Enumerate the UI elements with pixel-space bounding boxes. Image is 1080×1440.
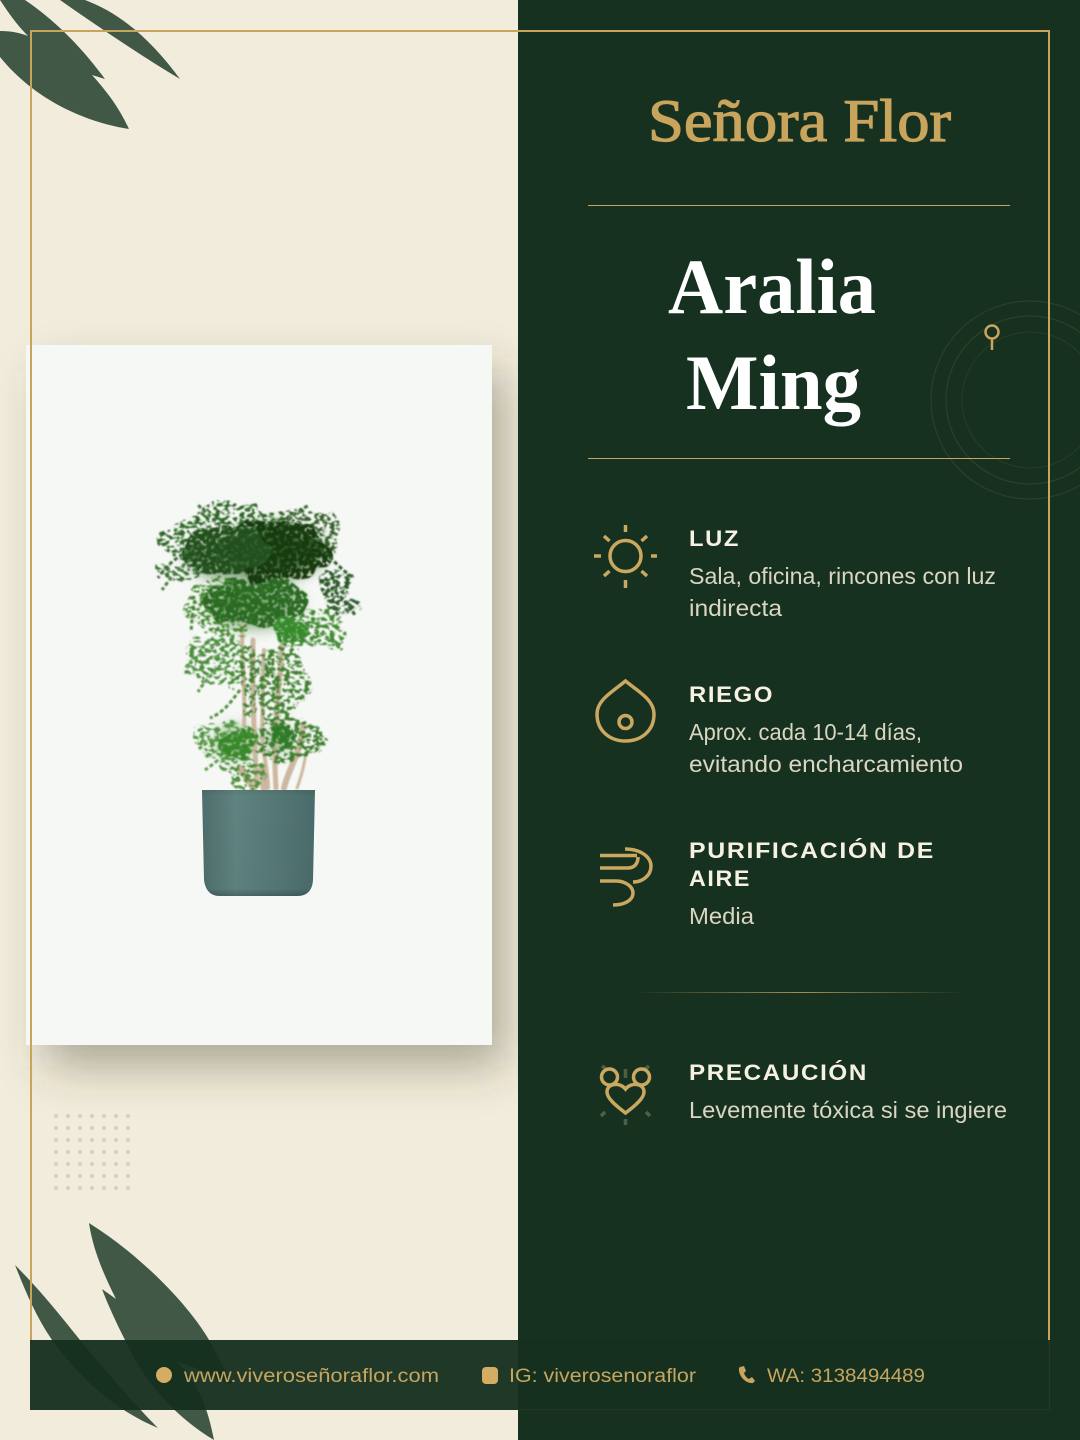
footer bar xyxy=(30,1340,1050,1410)
bottom rule xyxy=(588,458,1010,459)
footer: website: www.viveroseñoraflor.com xyxy=(183,1366,439,1387)
icon: sun xyxy=(594,525,657,588)
text: riego: evitando encharcamiento xyxy=(689,751,963,777)
sparse outer foliage xyxy=(156,505,356,786)
footer: whatsapp: WA: 3138494489 xyxy=(767,1366,925,1387)
care item: riego xyxy=(597,681,963,777)
heading: purificacion xyxy=(689,838,935,891)
plant name xyxy=(668,243,876,426)
left cream background xyxy=(0,0,518,1440)
plant name: Aralia xyxy=(668,243,876,330)
card shadow xyxy=(46,372,504,1066)
heading: precaucion: PRECAUCIÓN xyxy=(689,1060,868,1085)
top rule xyxy=(588,205,1010,206)
text: luz xyxy=(689,563,996,621)
heading: riego: RIEGO xyxy=(689,682,774,707)
pot xyxy=(202,790,315,896)
text: riego xyxy=(689,719,963,777)
decorative rings xyxy=(931,301,1080,499)
heading: purificacion: PURIFICACIÓN DE xyxy=(689,838,935,863)
plant illustration xyxy=(156,505,356,896)
icon: drop xyxy=(597,681,654,741)
dot grid xyxy=(54,1114,130,1190)
top-left leaves xyxy=(0,0,180,129)
care item: precaucion xyxy=(601,1060,1007,1125)
trunks xyxy=(240,625,306,788)
text: riego: Aprox. cada 10-14 días, xyxy=(689,719,922,745)
icon: heart xyxy=(601,1066,650,1125)
icon: wind xyxy=(600,849,651,905)
section divider xyxy=(636,992,966,993)
text: luz: Sala, oficina, rincones con luz xyxy=(689,563,996,589)
heading: luz: LUZ xyxy=(689,526,740,551)
right dark green panel xyxy=(518,0,1080,1440)
bottom-left leaves xyxy=(15,1223,232,1440)
plant name: Ming xyxy=(686,339,861,426)
photo card xyxy=(26,345,492,1045)
twigs with leaflets xyxy=(158,505,355,786)
heading: purificacion: AIRE xyxy=(689,866,751,891)
care item: luz xyxy=(594,525,996,621)
icon: pin xyxy=(986,326,998,350)
text: purificacion: Media xyxy=(689,903,754,929)
dense crown foliage xyxy=(181,522,327,760)
footer: instagram: IG: viverosenoraflor xyxy=(509,1366,697,1387)
foliage shade xyxy=(188,526,322,758)
text: precaucion: Levemente tóxica si se ingiere xyxy=(689,1097,1007,1123)
brand title: Señora Flor xyxy=(648,88,951,154)
text: luz: indirecta xyxy=(689,595,782,621)
care item: purificacion de aire xyxy=(600,838,935,929)
